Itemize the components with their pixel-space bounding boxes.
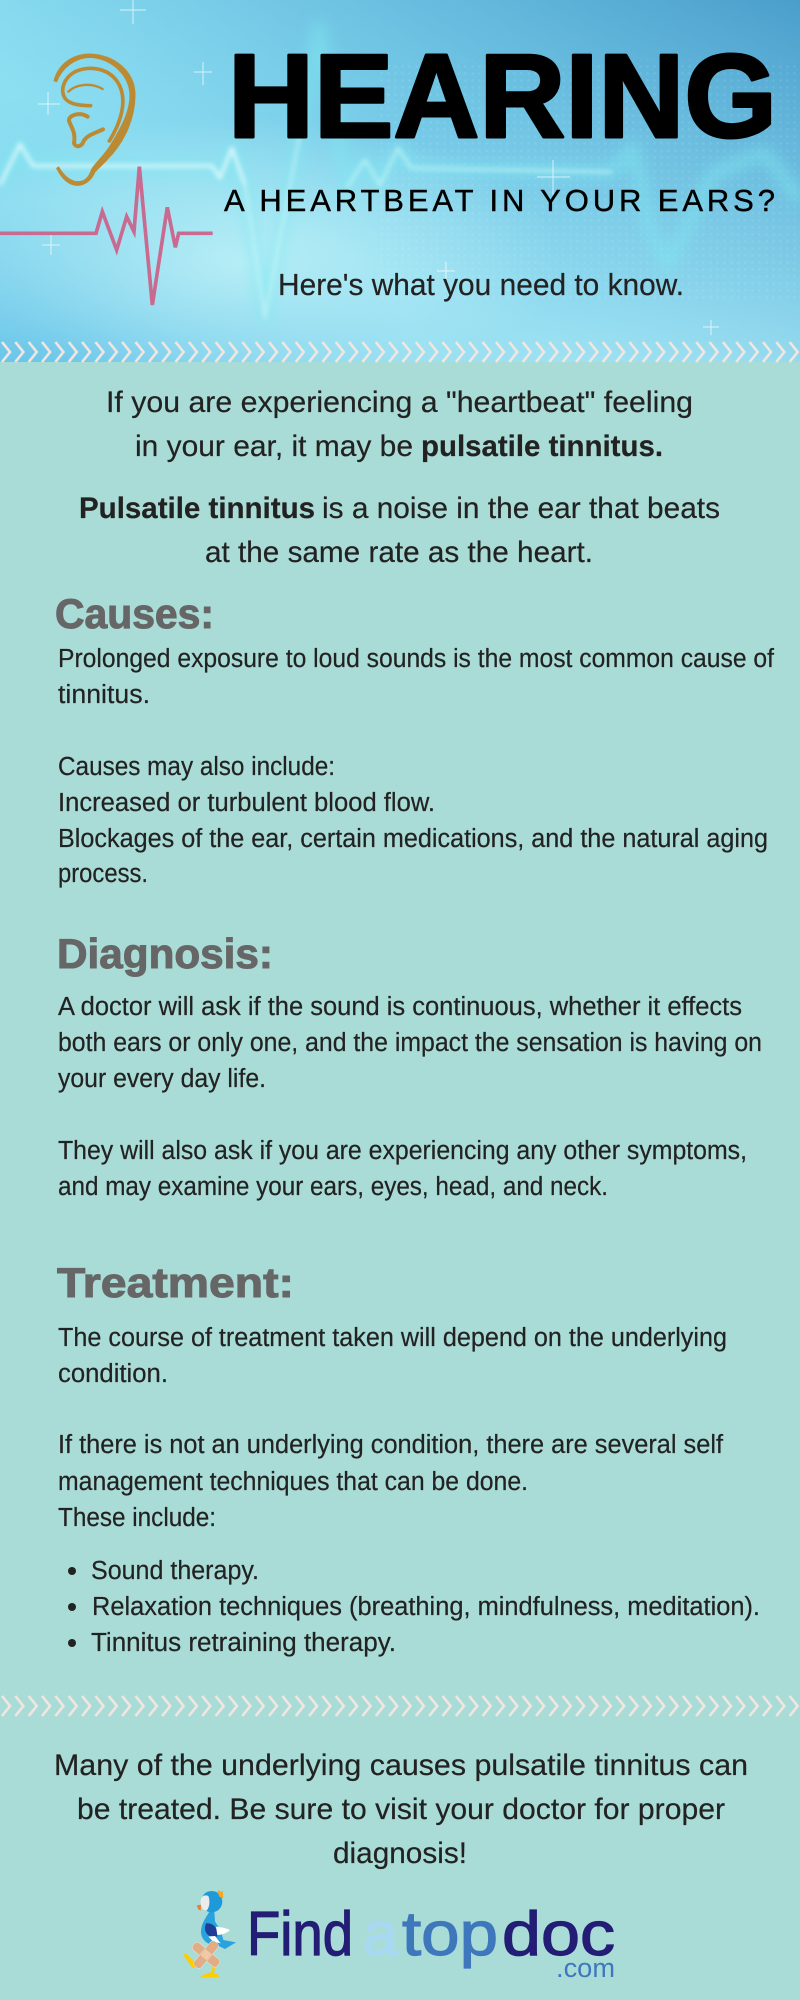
treatment list — [68, 1557, 760, 1657]
header banner — [0, 0, 800, 362]
intro text: If you are experiencing a "heartbeat" feeling — [106, 386, 693, 419]
intro text — [79, 386, 720, 569]
logo wordmark: Find — [247, 1900, 353, 1969]
causes text: Prolonged exposure to loud sounds is the most common cause of — [58, 645, 775, 673]
subtitle: A HEARTBEAT IN YOUR EARS? — [224, 183, 775, 218]
causes text: Blockages of the ear, certain medications, and the natural aging — [58, 825, 768, 853]
closing message: diagnosis! — [333, 1837, 467, 1870]
diagnosis text: A doctor will ask if the sound is continuous, whether it effects — [58, 993, 742, 1021]
panel: causes — [55, 590, 775, 888]
causes text: Increased or turbulent blood flow. — [58, 789, 435, 817]
causes text — [58, 645, 775, 888]
logo wordmark: doc — [502, 1900, 615, 1969]
tagline: Here's what you need to know. — [278, 267, 684, 302]
treatment list: Sound therapy. — [91, 1557, 259, 1585]
diagnosis text: both ears or only one, and the impact the sensation is having on — [58, 1029, 762, 1057]
logo wordmark: top — [402, 1900, 498, 1969]
heading: diagnosis: Diagnosis: — [57, 930, 273, 977]
treatment text: condition. — [58, 1360, 168, 1388]
logo wordmark — [247, 1900, 615, 1983]
heading: treatment: Treatment: — [57, 1259, 294, 1306]
treatment text: management techniques that can be done. — [58, 1468, 528, 1496]
icon: heartbeat pulse line — [0, 167, 213, 305]
closing message: Many of the underlying causes pulsatile tinnitus can — [54, 1749, 748, 1782]
intro text: Pulsatile tinnitus — [79, 492, 315, 525]
causes text: Causes may also include: — [58, 753, 335, 781]
treatment text: If there is not an underlying condition, there are several self — [58, 1431, 724, 1459]
treatment text: These include: — [58, 1504, 216, 1532]
logo wordmark: a — [363, 1900, 399, 1969]
closing message — [54, 1749, 748, 1870]
diagnosis text: They will also ask if you are experiencing any other symptoms, — [58, 1137, 747, 1165]
heading: causes: Causes: — [55, 590, 214, 637]
logo wordmark: .com — [556, 1953, 615, 1983]
diagnosis text — [58, 993, 762, 1201]
treatment text — [58, 1324, 727, 1532]
diagnosis text: your every day life. — [58, 1065, 266, 1093]
panel: treatment — [57, 1259, 760, 1657]
logo — [183, 1890, 615, 1983]
treatment text: The course of treatment taken will depend on the underlying — [58, 1324, 727, 1352]
causes text: tinnitus. — [58, 681, 150, 709]
causes text: process. — [58, 860, 148, 888]
panel: diagnosis — [57, 930, 762, 1201]
treatment list: Relaxation techniques (breathing, mindfulness, meditation). — [92, 1593, 760, 1621]
intro text: at the same rate as the heart. — [205, 536, 593, 569]
icon: bird mascot — [183, 1890, 236, 1977]
closing message: be treated. Be sure to visit your doctor for proper — [77, 1793, 725, 1826]
intro text: pulsatile tinnitus. — [421, 430, 663, 463]
title: HEARING — [228, 30, 777, 163]
icon: ear — [54, 54, 135, 185]
diagnosis text: and may examine your ears, eyes, head, and neck. — [58, 1173, 608, 1201]
treatment list: Tinnitus retraining therapy. — [91, 1629, 396, 1657]
intro text: is a noise in the ear that beats — [322, 492, 720, 525]
intro text: in your ear, it may be — [135, 430, 413, 463]
